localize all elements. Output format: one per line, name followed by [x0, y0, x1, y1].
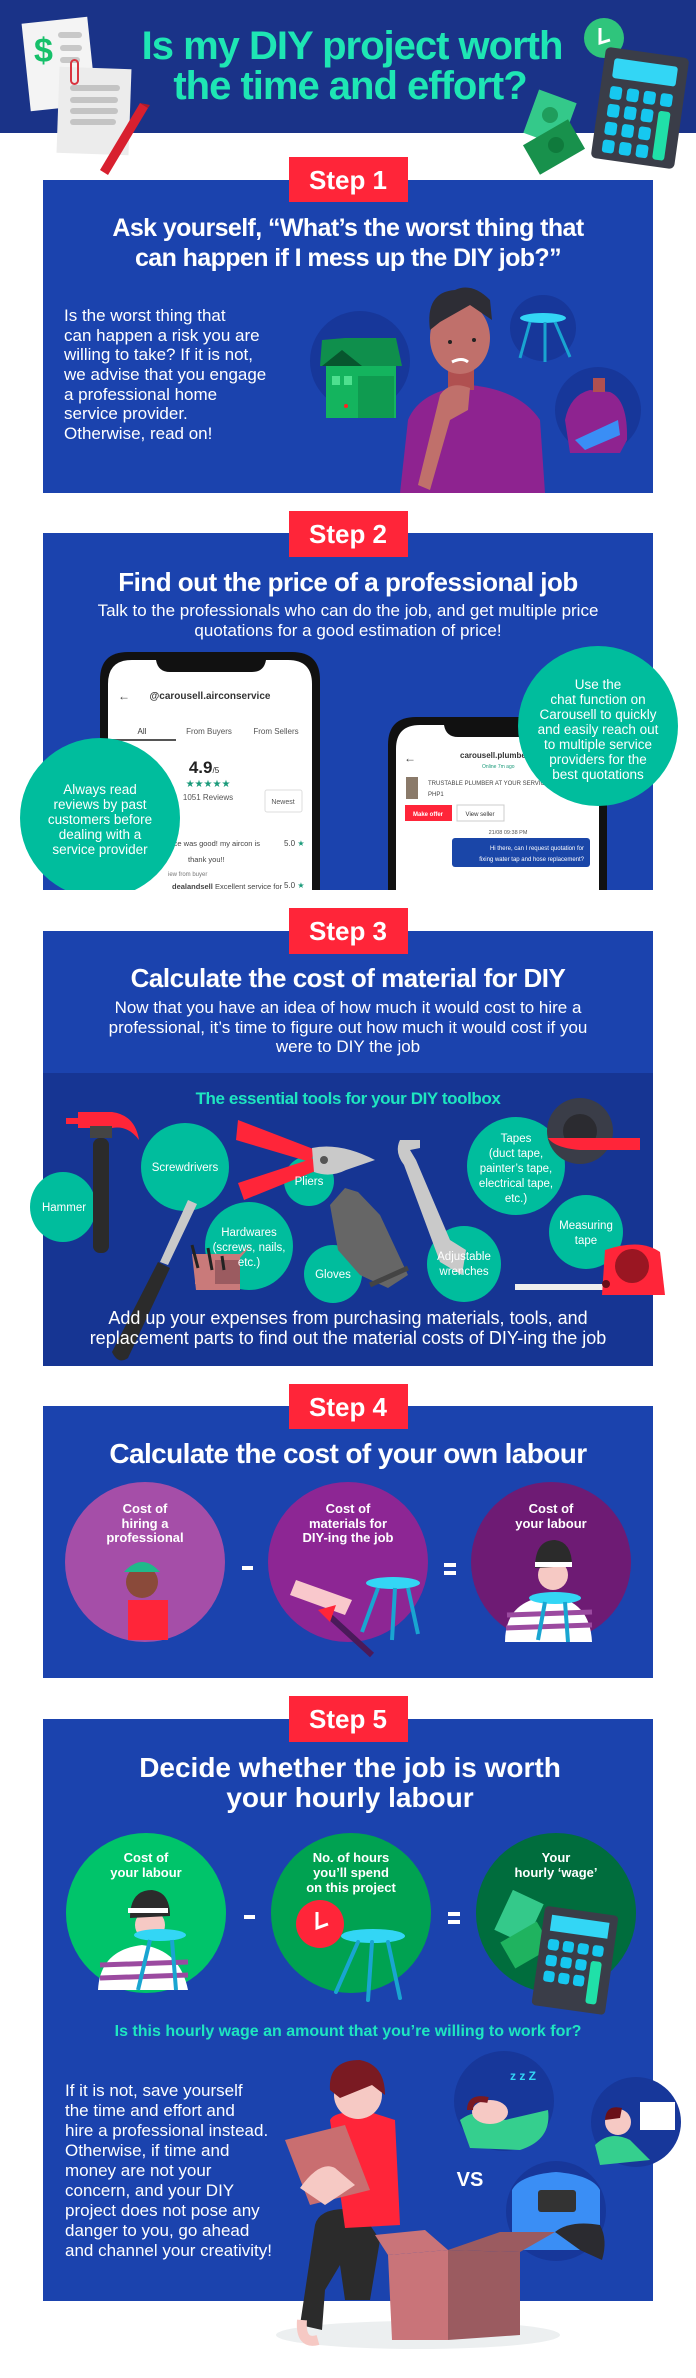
step 2 subtitle: quotations for a good estimation of price!: [194, 621, 502, 640]
equals sign: [444, 1563, 456, 1575]
step 4 badge: [289, 1384, 408, 1429]
icon: hammer: [66, 1112, 139, 1253]
step 1 badge: Step 1: [309, 165, 387, 195]
vs label: VS: [457, 2169, 483, 2191]
tool label text: Pliers: [295, 1176, 324, 1188]
step 1 heading: [112, 214, 585, 272]
equation: hiring professional: hiring a: [122, 1516, 169, 1531]
step 1 heading: can happen if I mess up the DIY job?”: [135, 244, 561, 272]
icon: damaged house: [310, 311, 410, 418]
phone: reviews: iew from buyer: [168, 872, 207, 878]
step 5 body text: danger to you, go ahead: [65, 2221, 249, 2240]
icon: gaming: [506, 2161, 606, 2261]
minus sign: [244, 1915, 255, 1919]
step 5 body text: concern, and your DIY: [65, 2181, 234, 2200]
callout: reviews: service provider: [52, 842, 148, 857]
equation: hours: on this project: [306, 1880, 396, 1895]
icon: gloves: [330, 1188, 408, 1288]
callout: chat: and easily reach out: [538, 722, 659, 737]
step 3 description: professional, it’s time to figure out how much it would cost if you: [109, 1018, 587, 1037]
tool labels: [30, 1117, 623, 1303]
step 1 badge: [289, 157, 408, 202]
step 5 body text: Otherwise, if time and: [65, 2141, 229, 2160]
callout: chat: to multiple service: [544, 737, 652, 752]
equation: hourly wage: hourly ‘wage’: [514, 1865, 598, 1880]
step 2 badge: [289, 511, 408, 557]
panel: step 2: [20, 511, 678, 898]
step 3 bottom text: Add up your expenses from purchasing materials, tools, and: [108, 1308, 588, 1328]
tool label text: painter’s tape,: [480, 1163, 552, 1175]
phone: reviews: ice was good! my aircon is: [172, 839, 260, 848]
step 4 badge: Step 4: [309, 1392, 388, 1422]
phone: reviews: 1051 Reviews: [183, 793, 233, 802]
tool label text: Tapes: [501, 1133, 532, 1145]
step 5 badge: [289, 1696, 408, 1742]
illustration: man with box: [276, 2060, 560, 2349]
step 1 body text: service provider.: [64, 404, 188, 423]
tool label text: Gloves: [315, 1269, 351, 1281]
step 5 heading: Decide whether the job is worth: [139, 1752, 561, 1783]
phone: reviews: 5.0 ★: [284, 839, 305, 848]
step 3 heading: Calculate the cost of material for DIY: [131, 963, 565, 993]
callout: chat: [518, 646, 678, 806]
phone: chat: PHP1: [428, 792, 444, 798]
tool label text: tape: [575, 1235, 597, 1247]
callout: reviews: dealing with a: [59, 827, 142, 842]
step 3 description: [109, 998, 587, 1056]
equation: your labour: your labour: [515, 1516, 587, 1531]
header band: [0, 0, 696, 133]
phone: chat: Make offer: [413, 812, 444, 818]
icon: wobbly stool: [510, 295, 576, 362]
question: Is this hourly wage an amount that you’re willing to work for?: [115, 2023, 581, 2040]
icon: clock: [584, 18, 624, 58]
callout: reviews: customers before: [48, 812, 152, 827]
icon: wrench: [398, 1140, 466, 1275]
equation: hiring professional: Cost of: [123, 1501, 168, 1516]
icon: screwdriver: [112, 1200, 197, 1360]
minus sign: [242, 1566, 253, 1570]
step 2 badge: Step 2: [309, 519, 387, 549]
equation: materials: DIY-ing the job: [302, 1530, 394, 1545]
step 3 badge: [289, 908, 408, 954]
step 1 heading: Ask yourself, “What’s the worst thing that: [112, 214, 585, 242]
step 1 body text: Is the worst thing that: [64, 306, 226, 325]
tool label text: etc.): [505, 1193, 527, 1205]
title: [142, 24, 562, 108]
equation: cost of labour: [66, 1833, 226, 1993]
equation: hiring professional: [65, 1482, 225, 1642]
callout: chat: Carousell to quickly: [539, 707, 657, 722]
tool label text: Screwdrivers: [152, 1162, 218, 1174]
icon: tape roll: [547, 1098, 640, 1164]
tool label text: wrenches: [438, 1266, 489, 1278]
icon: sleeping: z z Z: [510, 2069, 536, 2083]
icon: money: [523, 90, 585, 175]
icon: papers: [22, 17, 150, 175]
tool label text: electrical tape,: [479, 1178, 553, 1190]
phone: reviews: From Sellers: [253, 727, 299, 736]
callout: chat: chat function on: [550, 692, 646, 707]
step 1 body text: Otherwise, read on!: [64, 424, 212, 443]
tool label text: Hardwares: [221, 1227, 277, 1239]
panel: step 1: [43, 157, 653, 493]
tool label text: etc.): [238, 1257, 260, 1269]
phone: chat: [388, 717, 607, 890]
step 5 body text: hire a professional instead.: [65, 2121, 268, 2140]
callout: chat: best quotations: [552, 767, 644, 782]
icon: sleeping: [454, 2051, 554, 2151]
step 3 bottom text: [90, 1308, 606, 1348]
step 5 heading: [139, 1752, 561, 1813]
equation: hourly wage: [476, 1833, 636, 2015]
tool label text: [42, 1133, 613, 1281]
tool label text: Measuring: [559, 1220, 613, 1232]
equation: materials: [268, 1482, 428, 1655]
equation: cost of labour: Cost of: [124, 1850, 169, 1865]
panel: step 4: [43, 1384, 653, 1678]
phone: reviews: ★★★★★: [186, 779, 230, 790]
icon: injured arm: [555, 367, 641, 453]
equation: hours: you’ll spend: [313, 1865, 389, 1880]
title: the time and effort?: [173, 64, 527, 108]
step 1 body text: a professional home: [64, 385, 217, 404]
step 5 body text: project does not pose any: [65, 2201, 260, 2220]
phone: reviews: 5.0 ★: [284, 881, 305, 890]
phone: reviews: Newest: [271, 799, 295, 806]
step 5 body text: If it is not, save yourself: [65, 2081, 243, 2100]
step 1 body text: [63, 306, 266, 443]
phone: reviews: 4.9/5: [189, 758, 220, 777]
callout: chat: providers for the: [549, 752, 647, 767]
phone: reviews: @carousell.airconservice: [150, 691, 271, 702]
step 1 body text: willing to take? If it is not,: [63, 345, 253, 364]
equation: cost of labour: your labour: [110, 1865, 182, 1880]
icon: papers: $: [34, 32, 53, 70]
step 5 body text: [65, 2081, 272, 2260]
equation: materials: Cost of: [326, 1501, 371, 1516]
equation: hours: No. of hours: [313, 1850, 389, 1865]
phone: chat: Online 7m ago: [482, 764, 515, 770]
equation: hours: [271, 1833, 431, 2000]
callout: reviews: reviews by past: [53, 797, 147, 812]
phone: reviews: [100, 652, 320, 891]
step 4 heading: Calculate the cost of your own labour: [109, 1438, 587, 1469]
equation: hourly wage: Your: [542, 1850, 570, 1865]
panel: step 3: [30, 908, 665, 1366]
equation: your labour: [471, 1482, 631, 1642]
step 5 body text: and channel your creativity!: [65, 2241, 272, 2260]
phone: chat: View seller: [466, 812, 494, 818]
step 3 bottom text: replacement parts to find out the material costs of DIY-ing the job: [90, 1328, 606, 1348]
equals sign: [448, 1912, 460, 1924]
step 2 subtitle: [98, 601, 598, 640]
step 3 description: were to DIY the job: [275, 1037, 420, 1056]
step 5 body text: money are not your: [65, 2161, 212, 2180]
step 2 subtitle: Talk to the professionals who can do the job, and get multiple price: [98, 601, 598, 620]
step 1 body text: we advise that you engage: [63, 365, 266, 384]
toolbox subtitle: The essential tools for your DIY toolbox: [196, 1089, 501, 1108]
tool label text: (screws, nails,: [213, 1242, 285, 1254]
step 5 badge: Step 5: [309, 1704, 387, 1734]
tool label text: Hammer: [42, 1202, 86, 1214]
phone: chat: carousell.plumber: [460, 751, 529, 760]
phone: chat: fixing water tap and hose replacement?: [479, 857, 585, 863]
phone: chat: ←: [404, 751, 416, 765]
phone: reviews: dealandsell Excellent service for: [172, 882, 283, 891]
step 3 description: Now that you have an idea of how much it would cost to hire a: [115, 998, 582, 1017]
icon: measuring tape: [515, 1244, 665, 1295]
step 2 heading: Find out the price of a professional job: [118, 567, 578, 597]
callout: reviews: Always read: [63, 782, 137, 797]
step 3 badge: Step 3: [309, 916, 387, 946]
cover below step 2: [0, 890, 696, 908]
phone: reviews: All: [138, 727, 147, 736]
callout: reviews: [20, 738, 180, 898]
phone: reviews: From Buyers: [186, 727, 232, 736]
icon: pliers: [236, 1120, 375, 1200]
phone: chat: TRUSTABLE PLUMBER AT YOUR SERVICE: [428, 781, 549, 787]
step 5 heading: your hourly labour: [226, 1782, 474, 1813]
panel: step 5: [43, 1696, 681, 2301]
icon: hardwares: [192, 1244, 252, 1290]
phone: reviews: thank you!!: [188, 855, 225, 864]
equation: materials: materials for: [309, 1516, 387, 1531]
tool label text: Adjustable: [437, 1251, 491, 1263]
phone: chat: 21/08 09:38 PM: [489, 830, 528, 836]
tool label text: (duct tape,: [489, 1148, 543, 1160]
equation: your labour: Cost of: [529, 1501, 574, 1516]
icon: worried man: [400, 288, 545, 493]
equation: hiring professional: professional: [106, 1530, 184, 1545]
icon: calculator: [591, 47, 689, 169]
icon: laptop: [591, 2077, 681, 2167]
callout: chat: Use the: [575, 677, 621, 692]
step 5 body text: the time and effort and: [65, 2101, 235, 2120]
step 1 body text: can happen a risk you are: [64, 326, 260, 345]
phone: chat: Hi there, can I request quotation for: [490, 846, 584, 852]
phone: reviews: ←: [118, 689, 130, 703]
title: Is my DIY project worth: [142, 24, 562, 68]
